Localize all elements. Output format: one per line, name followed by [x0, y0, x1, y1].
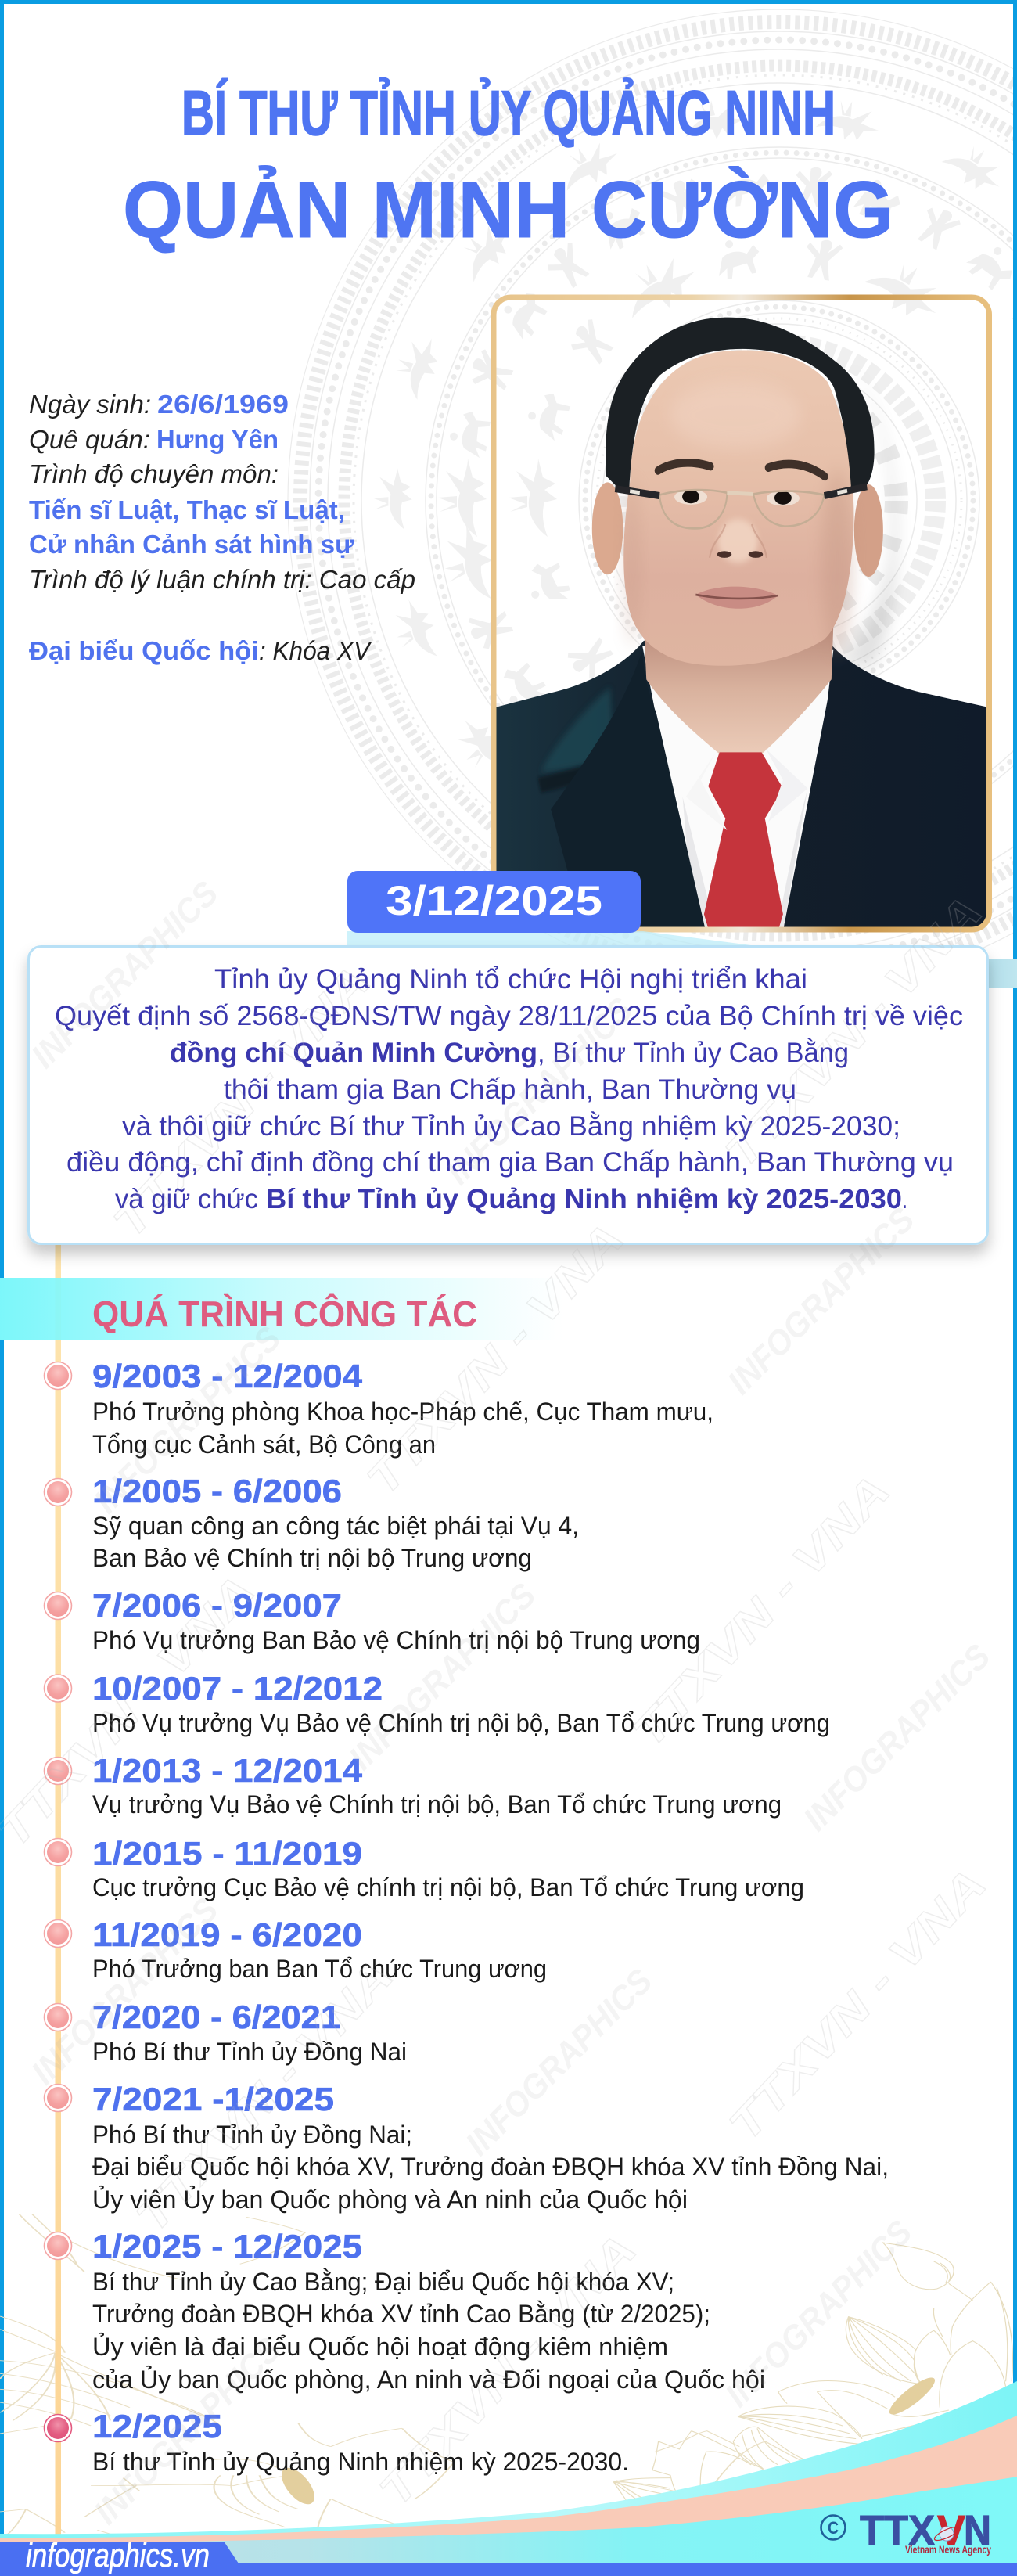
- white shirt: [642, 646, 833, 931]
- TTXVN logo: N: [964, 2507, 991, 2554]
- timeline entry 10: Bí thư Tỉnh ủy Cao Bằng; Đại biểu Quốc hội khóa XV;: [92, 2268, 674, 2296]
- timeline entry 7: Phó Trưởng ban Ban Tổ chức Trung ương: [92, 1955, 547, 1983]
- timeline entry 5: [44, 1752, 782, 1819]
- announcement panel: điều động, chỉ định đồng chí tham gia Ban Chấp hành, Ban Thường vụ: [66, 1147, 954, 1178]
- TTXVN logo: TTX: [860, 2507, 935, 2554]
- head shadow: [843, 493, 900, 671]
- announcement panel: Quyết định số 2568-QĐNS/TW ngày 28/11/2025 của Bộ Chính trị về việc: [55, 1001, 963, 1031]
- lotus illustration: bottom right: [613, 2243, 1012, 2504]
- timeline entry 8: Phó Bí thư Tỉnh ủy Đồng Nai: [92, 2038, 407, 2066]
- timeline entry 3: [44, 1587, 700, 1654]
- right accent strip: [987, 959, 1017, 988]
- timeline entry 10: 1/2025 - 12/2025: [92, 2228, 362, 2265]
- announcement panel: Bí thư Tỉnh ủy Quảng Ninh nhiệm kỳ 2025-2030: [266, 1184, 902, 1214]
- profile facts: Ngày sinh:: [29, 390, 151, 419]
- agency watermarks: INFOGRAPHICS: [87, 1319, 288, 1520]
- mouth: [695, 587, 778, 609]
- profile facts: [29, 390, 415, 665]
- announcement panel: , Bí thư Tỉnh ủy Cao Bằng: [537, 1038, 849, 1068]
- agency watermarks: TTXVN - VNA: [623, 1466, 899, 1757]
- announcement panel: thôi tham gia Ban Chấp hành, Ban Thường vụ: [224, 1074, 796, 1105]
- agency watermarks: TTXVN - VNA: [357, 1214, 633, 1505]
- lotus illustration: bottom left: [0, 2214, 830, 2538]
- timeline entry 9: 7/2021 -1/2025: [92, 2081, 334, 2117]
- agency watermarks: INFOGRAPHICS: [721, 1200, 922, 1401]
- footer bar: infographics.vn: [0, 2537, 1017, 2576]
- mask below the drum pattern: [0, 959, 1017, 2576]
- agency watermarks: TTXVN - VNA: [719, 1859, 995, 2150]
- profile facts: Hưng Yên: [156, 425, 279, 454]
- profile facts: Đại biểu Quốc hội: [29, 636, 259, 665]
- TTXVN logo: C: [828, 2518, 839, 2538]
- timeline entry 11: Bí thư Tỉnh ủy Quảng Ninh nhiệm kỳ 2025-2030.: [92, 2448, 629, 2476]
- title: [123, 77, 893, 254]
- agency watermarks: INFOGRAPHICS: [24, 1891, 225, 2092]
- profile facts: Quê quán:: [29, 425, 150, 454]
- agency watermarks: INFOGRAPHICS: [718, 2213, 919, 2414]
- agency watermarks: [0, 874, 997, 2531]
- timeline entry 9: Ủy viên Ủy ban Quốc phòng và An ninh của Quốc hội: [92, 2186, 688, 2214]
- timeline entry 8: 7/2020 - 6/2021: [92, 1999, 340, 2035]
- announcement panel: và thôi giữ chức Bí thư Tỉnh ủy Cao Bằng nhiệm kỳ 2025-2030;: [122, 1111, 900, 1142]
- timeline entry 4: 10/2007 - 12/2012: [92, 1670, 383, 1707]
- announcement panel: Tỉnh ủy Quảng Ninh tổ chức Hội nghị triển khai: [214, 964, 807, 995]
- neck: [644, 625, 833, 754]
- timeline entry 10: của Ủy ban Quốc phòng, An ninh và Đối ngoại của Quốc hội: [92, 2366, 765, 2394]
- collar and tie: [704, 752, 783, 931]
- timeline entry 1: 9/2003 - 12/2004: [92, 1358, 363, 1394]
- eyebrows: [658, 462, 710, 470]
- profile facts: : Khóa XV: [259, 636, 372, 665]
- lotus seed pod: right: [885, 2373, 940, 2419]
- timeline entry 5: Vụ trưởng Vụ Bảo vệ Chính trị nội bộ, Ban Tổ chức Trung ương: [92, 1790, 782, 1819]
- timeline entry 6: [44, 1835, 804, 1901]
- agency watermarks: INFOGRAPHICS: [24, 874, 225, 1075]
- timeline entry 9: Đại biểu Quốc hội khóa XV, Trưởng đoàn ĐBQH khóa XV tỉnh Đồng Nai,: [92, 2153, 889, 2181]
- title: QUẢN MINH CƯỜNG: [123, 165, 893, 254]
- decorative drum figures: [373, 95, 1017, 867]
- lotus seed pod: left: [275, 2463, 321, 2509]
- agency watermarks: INFOGRAPHICS: [796, 1637, 997, 1838]
- timeline entry 1: Tổng cục Cảnh sát, Bộ Công an: [92, 1430, 436, 1459]
- agency watermarks: INFOGRAPHICS: [439, 991, 640, 1192]
- portrait photo: [495, 318, 989, 931]
- suit jacket: [495, 641, 989, 931]
- photo frame: [494, 297, 989, 930]
- face: [623, 351, 853, 666]
- agency watermarks: TTXVN - VNA: [715, 887, 991, 1178]
- timeline entry 11: 12/2025: [92, 2408, 222, 2445]
- timeline entry 2: Ban Bảo vệ Chính trị nội bộ Trung ương: [92, 1544, 532, 1572]
- timeline entry 10: Ủy viên là đại biểu Quốc hội hoạt động kiêm nhiệm: [92, 2333, 668, 2361]
- announcement panel: đồng chí Quản Minh Cường: [170, 1038, 537, 1068]
- timeline entry 6: 1/2015 - 11/2019: [92, 1835, 362, 1872]
- hair: [606, 318, 875, 488]
- timeline entry 11: [44, 2408, 629, 2476]
- timeline entry 10: Trưởng đoàn ĐBQH khóa XV tỉnh Cao Bằng (từ 2/2025);: [92, 2300, 710, 2328]
- eyes: [674, 490, 707, 505]
- date badge: [347, 871, 641, 933]
- timeline entry 2: 1/2005 - 6/2006: [92, 1473, 342, 1509]
- announcement panel: [28, 947, 987, 1244]
- timeline entry 4: [44, 1670, 830, 1737]
- TTXVN logo: [821, 2507, 991, 2556]
- nose: [718, 520, 758, 563]
- announcement panel: .: [902, 1184, 907, 1214]
- agency watermarks: TTXVN - VNA: [126, 1951, 402, 2242]
- timeline entry 9: Phó Bí thư Tỉnh ủy Đồng Nai;: [92, 2121, 412, 2149]
- decorative bronze drum pattern: [288, 9, 1017, 992]
- timeline entry 7: 11/2019 - 6/2020: [92, 1916, 362, 1953]
- timeline entry 2: Sỹ quan công an công tác biệt phái tại Vụ 4,: [92, 1512, 579, 1540]
- profile facts: Trình độ chuyên môn:: [29, 459, 279, 488]
- timeline entry 2: [44, 1473, 579, 1572]
- timeline entry 7: [44, 1916, 547, 1983]
- timeline entry 4: Phó Vụ trưởng Vụ Bảo vệ Chính trị nội bộ, Ban Tổ chức Trung ương: [92, 1709, 830, 1737]
- timeline entry 5: 1/2013 - 12/2014: [92, 1752, 363, 1789]
- timeline entry 1: [44, 1358, 713, 1459]
- agency watermarks: INFOGRAPHICS: [87, 2330, 288, 2531]
- timeline entry 1: Phó Trưởng phòng Khoa học-Pháp chế, Cục Tham mưu,: [92, 1398, 713, 1426]
- profile facts: Tiến sĩ Luật, Thạc sĩ Luật,: [29, 495, 345, 524]
- agency watermarks: INFOGRAPHICS: [458, 1962, 659, 2163]
- date badge reflection: [347, 931, 751, 945]
- timeline entry 9: [44, 2081, 889, 2214]
- timeline entry 3: Phó Vụ trưởng Ban Bảo vệ Chính trị nội bộ Trung ương: [92, 1626, 700, 1654]
- timeline entry 6: Cục trưởng Cục Bảo vệ chính trị nội bộ, Ban Tổ chức Trung ương: [92, 1873, 804, 1901]
- ears: [592, 482, 623, 574]
- agency watermarks: TTXVN - VNA: [103, 956, 379, 1247]
- announcement panel: và giữ chức: [115, 1184, 258, 1214]
- profile facts: 26/6/1969: [157, 390, 289, 419]
- profile facts: Trình độ lý luận chính trị: Cao cấp: [29, 565, 415, 594]
- date badge: 3/12/2025: [386, 878, 602, 924]
- timeline entry 3: 7/2006 - 9/2007: [92, 1587, 342, 1624]
- agency watermarks: INFOGRAPHICS: [342, 1576, 543, 1777]
- agency watermarks: TTXVN - VNA: [369, 2225, 645, 2516]
- section band: career history: [0, 1278, 563, 1340]
- bottom waves: [0, 2381, 1017, 2576]
- timeline entry 8: [44, 1999, 407, 2066]
- profile facts: Cử nhân Cảnh sát hình sự: [29, 530, 354, 559]
- TTXVN logo: V: [937, 2507, 965, 2554]
- timeline entry 10: [44, 2228, 765, 2394]
- glasses: [659, 490, 825, 528]
- timeline vertical line: [55, 1245, 61, 2542]
- footer bar: infographics.vn: infographics.vn: [26, 2537, 210, 2574]
- section band: career history: QUÁ TRÌNH CÔNG TÁC: [92, 1293, 477, 1334]
